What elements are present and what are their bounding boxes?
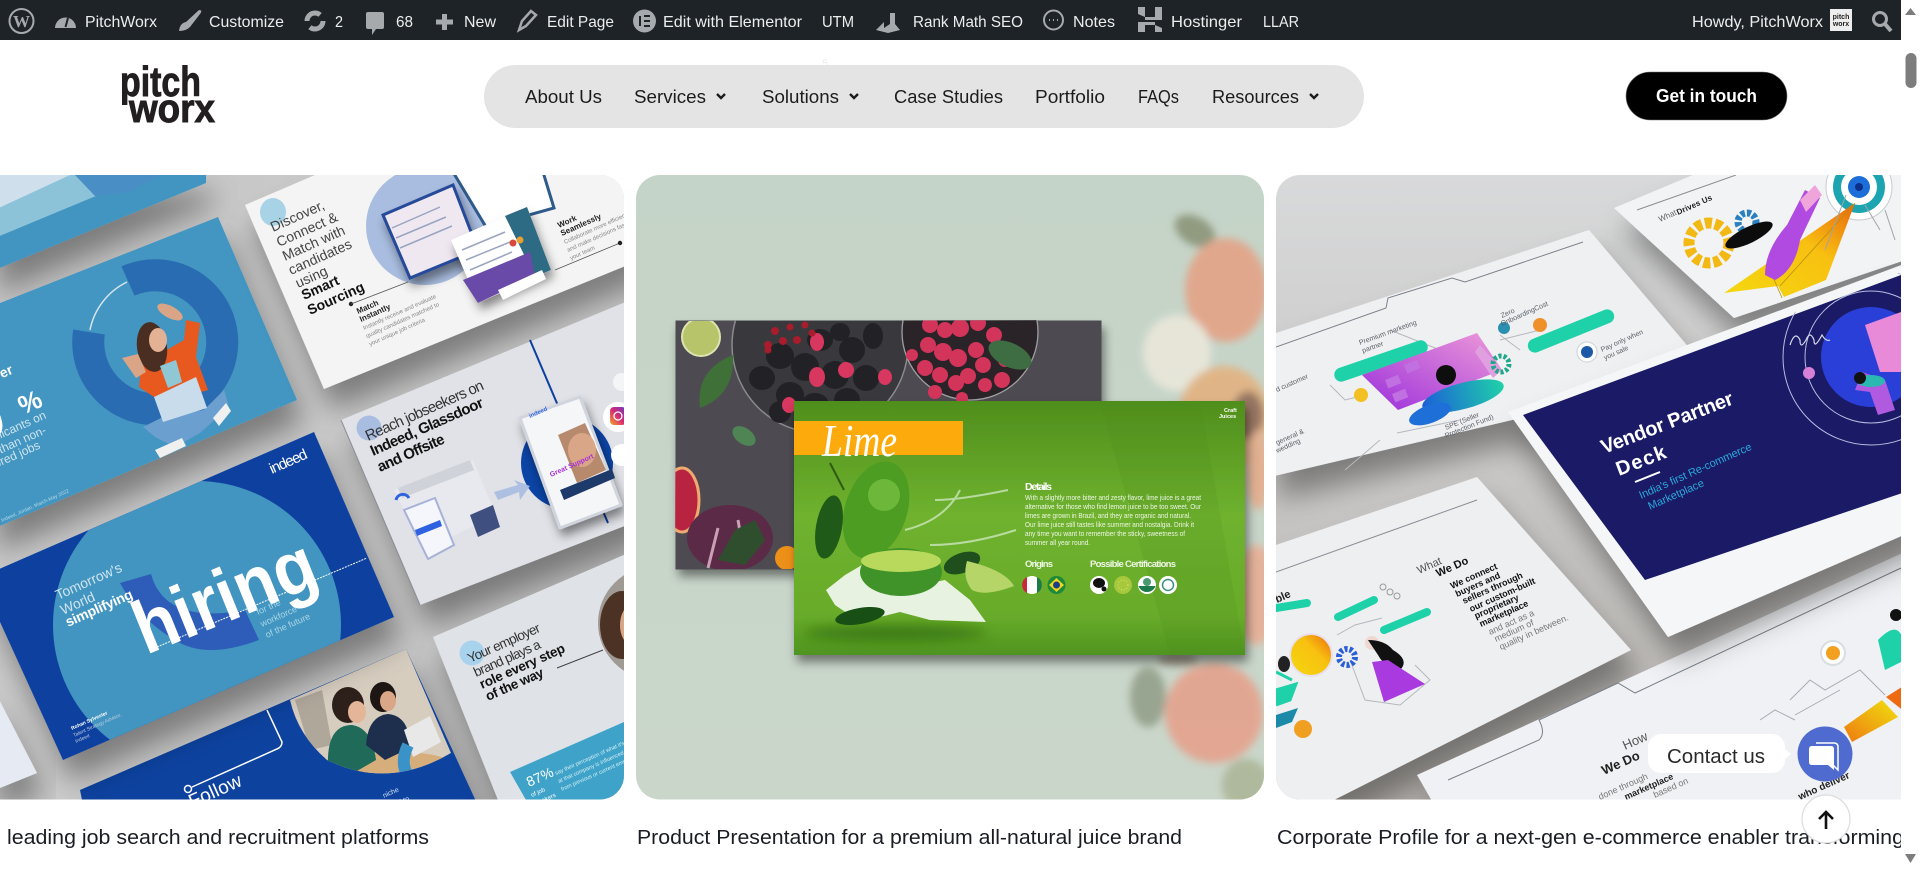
navigation pill xyxy=(484,65,1364,128)
text: match instantly and work seamlessly: Instantly receive and evaluate xyxy=(362,294,438,332)
admin bar: New xyxy=(464,14,496,31)
navigation pill: Case Studies xyxy=(894,87,1003,107)
slide: vendor partner deck xyxy=(1508,258,1920,637)
text: hiring headline: workforce xyxy=(258,604,298,629)
icon: instagram badge xyxy=(603,373,624,466)
text: details paragraph: alternative for those who find lemon juice to be too sweet. Our xyxy=(1025,502,1201,511)
navigation pill: Services xyxy=(634,87,706,107)
text: smart sourcing heading: Connect & xyxy=(274,208,341,250)
icon: interface cards xyxy=(383,172,554,303)
icon: portrait circle xyxy=(598,575,624,671)
icon: brand mark: Craft xyxy=(1224,408,1237,414)
slide: process flow xyxy=(1270,230,1725,477)
text: what we do copy: What xyxy=(1415,555,1444,577)
button: get in touch: Get in touch xyxy=(1656,86,1757,106)
text: hiring headline: Rohan Sylvester xyxy=(70,710,109,732)
text: flow labels: SPE (Seller xyxy=(1444,412,1481,432)
icon: services chevron xyxy=(717,94,725,98)
admin bar: 68 xyxy=(396,14,413,31)
text: details paragraph: summer all year round. xyxy=(1025,538,1090,547)
icon: phone with smiling woman: indeed xyxy=(528,406,549,420)
text: smart sourcing heading xyxy=(270,203,365,314)
text: flow labels: wedding xyxy=(1274,438,1302,455)
text: hiring headline: World xyxy=(58,588,97,618)
text: match instantly and work seamlessly: quality candidates matched to xyxy=(365,302,441,340)
text: details paragraph xyxy=(1025,481,1202,547)
icon: target xyxy=(1826,154,1892,220)
icon: chat widget button xyxy=(1798,726,1852,782)
text: how we do copy: based on xyxy=(1652,776,1690,800)
header logo xyxy=(120,58,215,131)
text: possible certifications with badges xyxy=(1090,559,1177,594)
text: match instantly and work seamlessly: Collaborate more efficiently xyxy=(563,211,632,246)
icon: comments bubble xyxy=(366,12,384,35)
text: what we do copy: and act as a xyxy=(1487,608,1536,637)
heading: lime banner xyxy=(794,421,963,456)
icon: wordpress xyxy=(10,9,34,33)
text: match instantly and work seamlessly: your team xyxy=(569,245,596,262)
text: statistic on slide: % xyxy=(13,384,47,420)
text: jobseekers heading: Indeed, Glassdoor xyxy=(368,394,486,460)
icon: search xyxy=(1874,12,1891,31)
icon: indeed wordmark: indeed xyxy=(267,446,310,478)
icon: brand mark xyxy=(1219,408,1237,418)
icon: woman with laptop xyxy=(122,300,231,458)
callout: 87 percent of job seekers: seekers xyxy=(535,793,557,807)
admin bar: Howdy, PitchWorx xyxy=(1692,14,1823,31)
panel: portfolio card 3 e-commerce deck xyxy=(1270,154,1920,815)
icon: customize brush xyxy=(179,10,201,31)
icon: phone with smiling woman: Great Support xyxy=(549,453,595,479)
icon: hostinger xyxy=(1138,7,1162,32)
slide: follow niche blue slide: niche xyxy=(382,787,400,800)
admin bar: Hostinger xyxy=(1171,14,1243,31)
text: employer brand heading: of the way xyxy=(483,665,546,704)
icon: lightbulb, gear and woman illustration: ble xyxy=(1273,588,1293,606)
text: hiring headline: Indeed xyxy=(74,733,91,745)
text: what we do copy xyxy=(1415,555,1570,652)
icon: orbit illustration with person xyxy=(1783,269,1920,445)
heading: lime banner: Lime xyxy=(821,415,897,466)
header logo: pitch xyxy=(120,58,201,105)
callout: 87 percent of job seekers: say their perception of what it's like xyxy=(554,737,635,777)
text: employer brand heading xyxy=(466,624,565,700)
header logo: worx xyxy=(128,87,215,131)
icon: blackberry bowl xyxy=(731,320,908,430)
admin bar: Edit Page xyxy=(547,14,614,31)
navigation pill: FAQs xyxy=(1138,87,1179,107)
icon: lime with water splash xyxy=(803,453,1016,641)
admin bar: 2 xyxy=(335,14,343,31)
icon: new plus xyxy=(436,14,453,30)
icon: dashboard xyxy=(55,18,76,28)
text: employer brand heading: Your employer xyxy=(465,620,543,666)
text: vendor partner title: Marketplace xyxy=(1646,477,1706,513)
icon: job listing mockups xyxy=(394,460,530,559)
text: details paragraph: limes are grown in Brazil, and they are organic and natural. xyxy=(1025,511,1191,520)
text: how we do copy: marketplace xyxy=(1623,771,1675,802)
text: details paragraph: any time you want to remember the sticky, sweetness of xyxy=(1025,529,1186,538)
text: drives us heading xyxy=(1657,193,1714,224)
text: match instantly and work seamlessly: Seamlessly xyxy=(559,212,603,238)
icon: blurred background fruit xyxy=(1130,208,1278,811)
text: how we do copy: How xyxy=(1620,728,1651,753)
text: what we do copy: our custom-built xyxy=(1468,576,1537,614)
chart: donut ring xyxy=(88,275,222,409)
admin bar: Edit with Elementor xyxy=(663,14,803,31)
slide: top-left blue slide xyxy=(0,170,206,272)
icon: phone with smiling woman xyxy=(520,397,621,528)
caption: card 2: Product Presentation for a premium all-natural juice brand xyxy=(637,827,1182,849)
text: hiring headline: simplifying xyxy=(63,586,135,630)
callout: 87 percent of job seekers: at that company is influenced xyxy=(557,750,625,785)
text: how we do copy: done through xyxy=(1597,771,1649,802)
text: hiring headline: of the future xyxy=(264,611,312,640)
admin bar: Customize xyxy=(209,14,284,31)
caption: card 1: leading job search and recruitment platforms xyxy=(7,827,429,849)
text: employer brand heading: brand plays a xyxy=(471,637,543,680)
slide: reach jobseekers xyxy=(341,296,640,605)
text: match instantly and work seamlessly: your unique job criteria xyxy=(368,317,427,348)
panel: portfolio card 2 juice brand xyxy=(636,175,1278,811)
text: jobseekers heading: Reach jobseekers on xyxy=(363,377,487,445)
icon: edit pencil xyxy=(519,11,536,30)
text: match instantly and work seamlessly: and make decisions faster with xyxy=(566,215,644,254)
text: statistic on slide xyxy=(0,361,70,524)
text: how we do copy xyxy=(1597,728,1852,803)
icon: brand mark: Juices xyxy=(1219,414,1236,420)
text: origins with flags xyxy=(1022,559,1066,594)
text: smart sourcing heading: Discover, xyxy=(268,197,327,235)
callout: 87 percent of job seekers: from previous or current employees xyxy=(560,752,642,793)
admin bar xyxy=(0,0,1901,40)
icon: avatar xyxy=(1830,9,1852,31)
icon: gears and paper plane figure xyxy=(1689,185,1895,298)
icon: purple drink glass xyxy=(687,505,799,571)
text: origins with flags: Origins xyxy=(1025,559,1053,570)
admin bar: PitchWorx xyxy=(85,14,157,31)
callout: 87 percent of job seekers: 87% xyxy=(524,764,556,790)
text: what we do copy: proprietary xyxy=(1473,592,1520,621)
text: what we do copy: We Do xyxy=(1434,555,1471,580)
text: how we do copy: who deliver xyxy=(1796,770,1852,803)
text: match instantly and work seamlessly xyxy=(349,211,644,348)
icon: elementor xyxy=(633,10,656,32)
slide: tomorrow's world simplifying hiring xyxy=(0,432,394,769)
text: flow labels: general & xyxy=(1275,428,1305,447)
text: statistic on slide: Indeed, Jordan, March-May 2022 xyxy=(0,488,70,524)
slide: green lime product slide xyxy=(794,401,1245,655)
browser scrollbar xyxy=(1901,0,1920,869)
icon: notes bubble xyxy=(1044,10,1063,30)
icon: avatar: pitch xyxy=(1833,14,1849,21)
text: hiring headline: Talent Strategy Advisor, xyxy=(72,712,123,739)
admin bar: LLAR xyxy=(1263,14,1299,31)
icon: flow illustration xyxy=(1330,307,1616,470)
callout: 87 percent of job seekers: of job xyxy=(530,787,547,799)
text: what we do copy: sellers through xyxy=(1461,570,1524,606)
text: flow labels: OnboardingCost xyxy=(1500,301,1549,328)
text: hiring headline xyxy=(54,548,368,743)
text: smart sourcing heading: using xyxy=(293,263,330,291)
navigation pill: Resources xyxy=(1212,87,1299,107)
icon: circuit with orange tags and figure xyxy=(1760,609,1905,742)
text: what we do copy: We connect xyxy=(1449,561,1499,591)
admin bar: Notes xyxy=(1073,14,1115,31)
slide: dark berries slide xyxy=(672,320,1111,583)
icon: solutions chevron xyxy=(850,94,858,98)
text: match instantly and work seamlessly: Instantly xyxy=(358,302,392,324)
callout: 87 percent of job seekers xyxy=(510,722,624,800)
slide: follow niche blue slide: and to xyxy=(390,795,411,810)
text: what we do copy: marketplace xyxy=(1478,598,1530,629)
icon: rank math xyxy=(876,13,900,33)
text: flow labels: d customer xyxy=(1275,373,1310,394)
icon: resources chevron xyxy=(1310,94,1318,98)
icon: avatar: worx xyxy=(1832,21,1849,28)
text: smart sourcing heading: candidates xyxy=(286,236,354,278)
text: possible certifications with badges: Possible Certifications xyxy=(1090,559,1176,570)
navigation pill: About Us xyxy=(525,87,602,107)
panel: portfolio card 1 recruitment slides xyxy=(0,175,624,800)
text: details paragraph: With a slightly more bitter and zesty flavor, lime juice is a great xyxy=(1025,493,1202,502)
text: flow labels: Premium marketing xyxy=(1358,320,1418,347)
text: vendor partner title: India's first Re-commerce xyxy=(1637,441,1754,502)
faint stray mark: 5 xyxy=(822,58,828,70)
text: what we do copy: buyers and xyxy=(1454,570,1502,599)
text: what we do copy: medium of xyxy=(1493,617,1536,644)
icon: raspberry bowl xyxy=(901,320,1039,401)
slide: lower-left pale slide xyxy=(0,682,37,792)
slide: donut with smiling woman xyxy=(0,217,297,530)
text: match instantly and work seamlessly: Work xyxy=(556,213,578,230)
text: flow labels xyxy=(1274,301,1645,455)
button: get in touch xyxy=(1626,72,1787,120)
slide: follow niche blue slide xyxy=(80,645,480,813)
admin bar: UTM xyxy=(822,14,854,31)
text: details paragraph: Details xyxy=(1025,481,1052,493)
icon: lightbulb, gear and woman illustration xyxy=(1273,584,1430,738)
text: employer brand heading: role every step xyxy=(477,641,567,692)
text: hiring headline: hiring xyxy=(121,521,328,670)
slide: how we do xyxy=(1417,545,1920,815)
text: flow labels: partner xyxy=(1361,340,1385,355)
text: hiring headline: for the xyxy=(255,597,282,617)
text: vendor partner title: Deck xyxy=(1613,441,1670,481)
text: vendor partner title: Vendor Partner xyxy=(1598,388,1737,459)
slide: what drives us xyxy=(1614,154,1920,318)
text: how we do copy: We Do xyxy=(1599,748,1642,778)
text: drives us heading: Drives Us xyxy=(1675,193,1714,217)
icon: wordpress: W xyxy=(13,12,30,31)
navigation pill: Solutions xyxy=(762,87,839,107)
slide: your employer brand xyxy=(432,555,624,800)
icon: two women with laptop photo xyxy=(290,649,451,774)
icon: updates refresh xyxy=(307,13,323,29)
text: flow labels: you sale xyxy=(1603,345,1630,362)
admin bar: Rank Math SEO xyxy=(913,14,1023,31)
text: smart sourcing heading: Smart xyxy=(299,272,342,303)
slide: discover connect match smart sourcing xyxy=(245,167,644,389)
navigation pill: Portfolio xyxy=(1035,87,1105,107)
text: vendor partner title xyxy=(1598,388,1754,513)
text: match instantly and work seamlessly: Match xyxy=(355,298,380,316)
caption: card 3: Corporate Profile for a next-gen e-commerce enabler transforming xyxy=(1277,827,1904,849)
button: scroll to top xyxy=(1802,795,1850,843)
text: flow labels: Zero xyxy=(1500,308,1516,320)
text: flow labels: Pay only when xyxy=(1600,329,1645,354)
widget: contact us label xyxy=(1648,734,1791,773)
text: smart sourcing heading: Sourcing xyxy=(305,278,367,318)
text: jobseekers heading: and Offsite xyxy=(375,431,447,476)
text: flow labels: Protection Fund) xyxy=(1444,414,1495,440)
text: smart sourcing heading: Match with xyxy=(280,222,347,264)
slide: what we do xyxy=(1270,477,1631,815)
text: follow: Follow xyxy=(185,770,245,813)
text: hiring headline: Tomorrow's xyxy=(53,559,124,603)
text: drives us heading: What xyxy=(1657,208,1679,224)
widget: contact us label: Contact us xyxy=(1667,746,1765,768)
icon: lime slice and leaves xyxy=(675,320,756,534)
text: what we do copy: quality in between. xyxy=(1498,612,1570,652)
text: details paragraph: Our lime juice still tastes like summer and nostalgia. Drink it xyxy=(1025,520,1195,529)
